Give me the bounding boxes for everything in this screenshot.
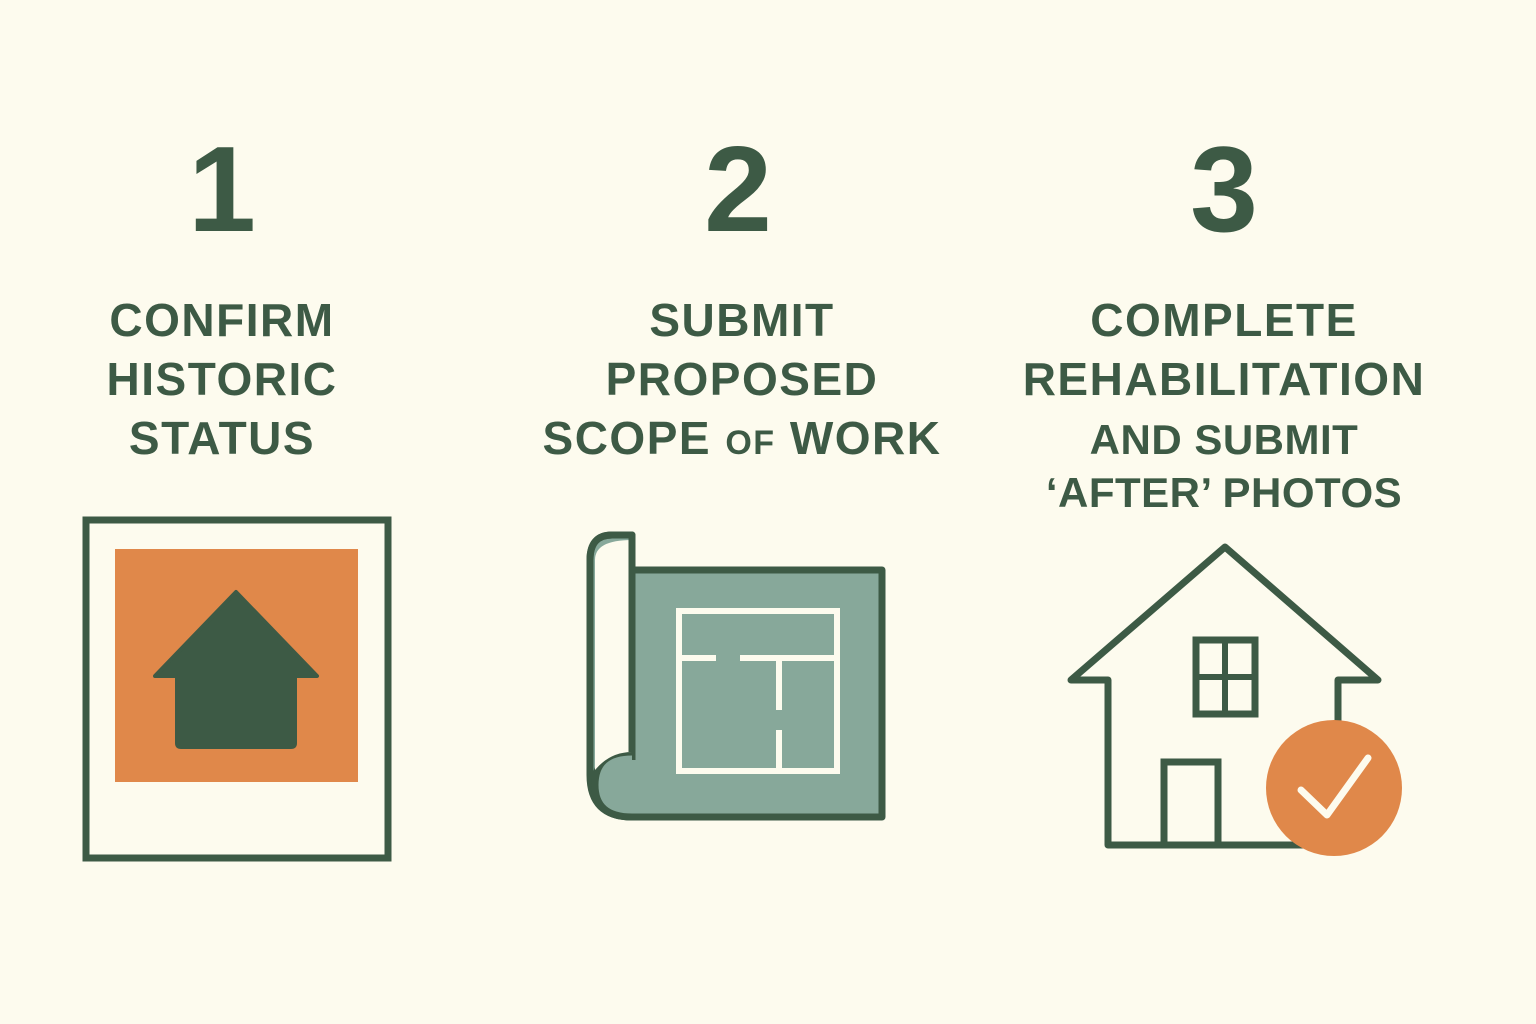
step 3 title: [1023, 294, 1425, 516]
step 2 title: SUBMIT: [649, 294, 835, 346]
step 2 title: SCOPE OF WORK: [543, 412, 941, 464]
step 3 title: REHABILITATION: [1023, 353, 1425, 405]
step 2 title: [543, 294, 941, 464]
step 1 title: HISTORIC: [107, 353, 337, 405]
step 3 title: COMPLETE: [1090, 294, 1358, 346]
step 2 title: PROPOSED: [606, 353, 878, 405]
icon: blueprint scroll: [590, 535, 882, 817]
step 3 title: AND SUBMIT: [1090, 416, 1358, 463]
step 1 title: STATUS: [129, 412, 315, 464]
step 3 number: 3: [1190, 121, 1258, 257]
step 2 number: 2: [704, 121, 772, 257]
step 1 title: [107, 294, 337, 464]
step 1 title: CONFIRM: [109, 294, 335, 346]
step 3 title: ‘AFTER’ PHOTOS: [1046, 469, 1402, 516]
icon: house with checkmark: [1071, 547, 1402, 856]
icon: historic photo frame: [86, 520, 388, 858]
step 1 number: 1: [188, 121, 256, 257]
